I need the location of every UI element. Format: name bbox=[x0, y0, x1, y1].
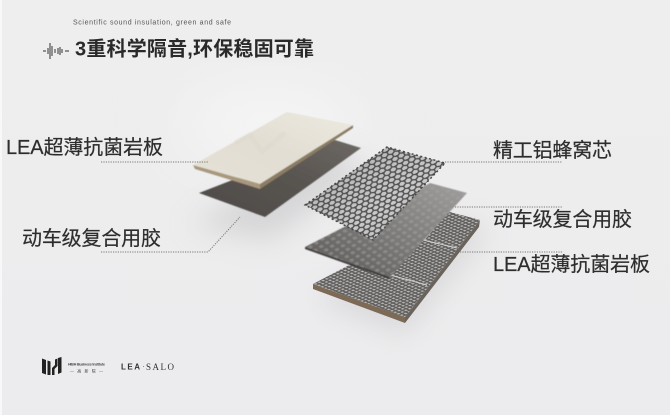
leader line: right rock slab bbox=[460, 251, 562, 253]
leader line: left adhesive bbox=[101, 217, 240, 252]
icon: sound waveform bbox=[43, 43, 69, 59]
logo: institute mark bbox=[42, 357, 62, 375]
logo: LEA SALO: LEA bbox=[121, 362, 140, 372]
leader line: right adhesive bbox=[455, 206, 562, 208]
left product: exploded layers bbox=[193, 112, 361, 217]
layer: lower rock slab with mesh back bbox=[313, 212, 480, 323]
leader line: left rock slab bbox=[101, 161, 208, 163]
label: right adhesive: 动车级复合用胶 bbox=[493, 208, 632, 231]
leader line: honeycomb bbox=[445, 161, 562, 163]
logo: institute name bbox=[68, 362, 105, 374]
label: honeycomb core: 精工铝蜂窝芯 bbox=[493, 139, 612, 162]
layer: composite adhesive sheet bbox=[199, 140, 361, 217]
layer: aluminium honeycomb core bbox=[305, 147, 445, 240]
title: 3重科学隔音,环保稳固可靠 bbox=[75, 36, 314, 60]
right product: exploded layers bbox=[305, 147, 480, 323]
layer: ultra-thin rock slab bbox=[193, 112, 353, 189]
label: left rock slab: LEA超薄抗菌岩板 bbox=[6, 136, 163, 159]
logo: institute name: HIBH Business Institute bbox=[68, 362, 105, 366]
logo: LEA SALO bbox=[121, 362, 174, 372]
layer: composite adhesive sheet bbox=[305, 183, 467, 279]
logo: institute name: — 高 新 院 — bbox=[70, 368, 103, 374]
subtitle: Scientific sound insulation, green and safe bbox=[73, 20, 231, 26]
logo: LEA SALO: · bbox=[142, 364, 145, 370]
label: right rock slab: LEA超薄抗菌岩板 bbox=[493, 253, 650, 276]
label: left adhesive: 动车级复合用胶 bbox=[22, 227, 161, 250]
logo: LEA SALO: SALO bbox=[146, 362, 174, 372]
